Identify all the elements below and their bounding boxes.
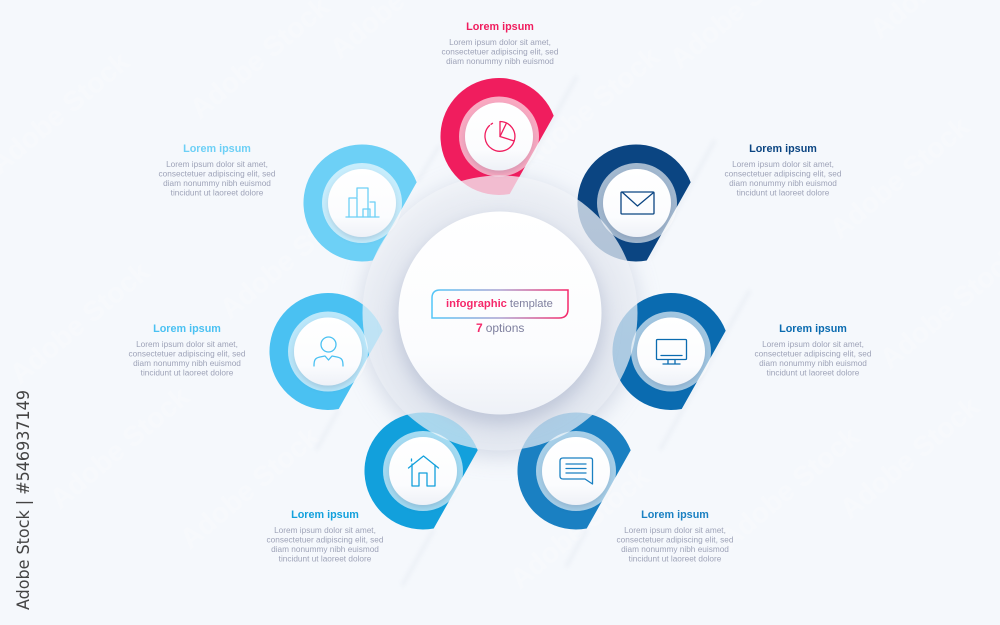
ocean blue pin button [536, 431, 616, 511]
light blue pin button [322, 163, 402, 243]
icon: buildings [346, 188, 379, 217]
pin: cyan blue [364, 412, 478, 529]
icon: person [314, 337, 343, 366]
icon: monitor [656, 340, 686, 364]
watermark pattern: Adobe Stock [174, 421, 325, 555]
text block: top red: Lorem ipsum dolor sit amet, [449, 38, 551, 47]
text block: mid blue: Lorem ipsum dolor sit amet, [762, 340, 864, 349]
icon: envelope [621, 192, 654, 214]
watermark pattern: Adobe Stock [44, 381, 195, 515]
text block: navy [725, 143, 842, 198]
text block: sky blue: diam nonummy nibh euismod [133, 359, 241, 368]
text block: mid blue: tincidunt ut laoreet dolore [767, 368, 860, 378]
text block: light blue: diam nonummy nibh euismod [163, 179, 271, 188]
text block: light blue: consectetuer adipiscing elit, sed [159, 170, 276, 178]
text block: navy: diam nonummy nibh euismod [729, 179, 837, 188]
text block: navy: tincidunt ut laoreet dolore [737, 188, 830, 198]
icon: house [408, 456, 438, 486]
pin: sky blue [269, 293, 383, 410]
text block: light blue: Lorem ipsum [183, 143, 251, 155]
watermark pattern: Adobe Stock [824, 111, 975, 245]
text block: cyan blue: Lorem ipsum [291, 509, 359, 521]
text block: sky blue [129, 323, 246, 378]
text block: cyan blue: Lorem ipsum dolor sit amet, [274, 526, 376, 535]
pin: ocean blue [517, 412, 631, 529]
watermark pattern: Adobe Stock [514, 41, 665, 175]
text block: sky blue: Lorem ipsum [153, 323, 221, 335]
text block: ocean blue [617, 509, 734, 564]
text block: ocean blue: consectetuer adipiscing elit, sed [617, 536, 734, 544]
centre title: infographic template [446, 298, 553, 310]
text block: cyan blue: diam nonummy nibh euismod [271, 545, 379, 554]
text block: cyan blue: consectetuer adipiscing elit, sed [267, 536, 384, 544]
text block: top red: Lorem ipsum [466, 21, 534, 33]
diagonal soft shadows [316, 76, 750, 586]
centre subtitle: 7options [476, 321, 524, 335]
cyan blue pin button [383, 431, 463, 511]
text block: top red: diam nonummy nibh euismod [446, 57, 554, 66]
text block: mid blue: Lorem ipsum [779, 323, 847, 335]
red pin button [459, 96, 539, 176]
watermark pattern: Adobe Stock [214, 191, 365, 325]
text block: navy: Lorem ipsum dolor sit amet, [732, 160, 834, 169]
pin: mid blue [612, 293, 726, 410]
text block: navy: Lorem ipsum [749, 143, 817, 155]
text block: mid blue: diam nonummy nibh euismod [759, 359, 867, 368]
text block: light blue [159, 143, 276, 198]
centre white disc [397, 212, 603, 424]
text block: light blue: Lorem ipsum dolor sit amet, [166, 160, 268, 169]
navy pin button [597, 163, 677, 243]
text block: sky blue: consectetuer adipiscing elit, sed [129, 350, 246, 358]
watermark pattern: Adobe Stock [4, 256, 155, 390]
text block: ocean blue: diam nonummy nibh euismod [621, 545, 729, 554]
text block: sky blue: tincidunt ut laoreet dolore [141, 368, 234, 378]
stock id caption: Adobe Stock | #546937149 [14, 390, 34, 610]
centre title frame [432, 290, 568, 318]
pin: light blue [303, 144, 417, 261]
mid blue pin button [631, 312, 711, 392]
pin: red [440, 78, 554, 195]
watermark pattern: Adobe Stock [834, 391, 985, 525]
icon: pie chart [485, 122, 515, 151]
text block: cyan blue: tincidunt ut laoreet dolore [279, 554, 372, 564]
pin: navy [577, 144, 691, 261]
text block: light blue: tincidunt ut laoreet dolore [171, 188, 264, 198]
watermark pattern: Adobe Stock [714, 421, 865, 555]
watermark pattern: Adobe Stock [504, 461, 655, 595]
text block: ocean blue: tincidunt ut laoreet dolore [629, 554, 722, 564]
text block: ocean blue: Lorem ipsum [641, 509, 709, 521]
text block: top red [442, 21, 559, 66]
text block: mid blue: consectetuer adipiscing elit, sed [755, 350, 872, 358]
centre translucent ring [362, 176, 638, 450]
text block: mid blue [755, 323, 872, 378]
sky blue pin button [288, 312, 368, 392]
text block: top red: consectetuer adipiscing elit, sed [442, 48, 559, 56]
text block: ocean blue: Lorem ipsum dolor sit amet, [624, 526, 726, 535]
text block: cyan blue [267, 509, 384, 564]
text block: sky blue: Lorem ipsum dolor sit amet, [136, 340, 238, 349]
text block: navy: consectetuer adipiscing elit, sed [725, 170, 842, 178]
icon: speech bubble [560, 458, 592, 484]
shadow of centre ring [363, 181, 637, 455]
